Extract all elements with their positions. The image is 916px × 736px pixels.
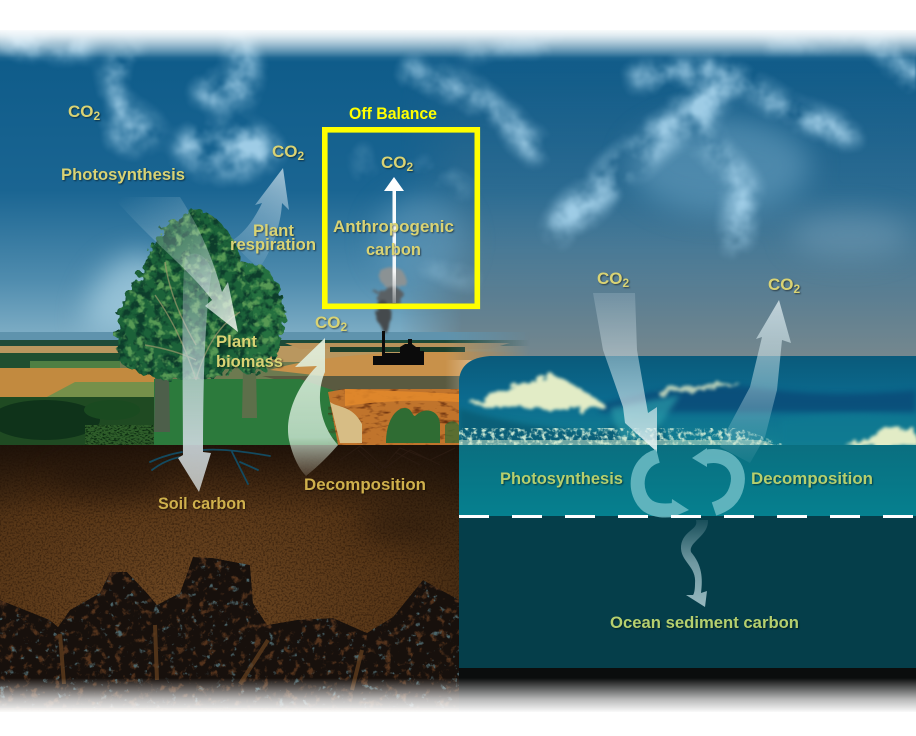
tree: small xyxy=(219,263,285,418)
label: CO2 ocean in: CO xyxy=(597,269,622,288)
label: plant biomass xyxy=(216,332,283,371)
label: CO2 box: CO xyxy=(381,153,406,172)
panel: ocean surface xyxy=(459,350,916,446)
label: plant respiration xyxy=(230,221,316,254)
arrow: land decomposition xyxy=(288,338,338,476)
label: soil carbon: Soil carbon xyxy=(158,494,246,513)
arrow: ocean cycle left xyxy=(638,456,689,518)
label: plant biomass: Plant xyxy=(216,332,257,351)
label: ocean sediment carbon: Ocean sediment carbon xyxy=(610,613,799,632)
label: decomposition ocean: Decomposition xyxy=(751,469,873,488)
label: CO2 respiration: 2 xyxy=(298,149,304,163)
tree: large xyxy=(117,210,253,432)
arrow: photosynthesis into plant xyxy=(113,197,238,332)
factory with smoke xyxy=(373,268,424,365)
carbon-rich rock layer xyxy=(0,557,459,708)
label: CO2 box: 2 xyxy=(406,160,414,174)
label: plant respiration: respiration xyxy=(230,235,316,254)
dark soil patches xyxy=(68,471,436,548)
label: decomposition land: Decomposition xyxy=(304,475,426,494)
label: plant biomass: biomass xyxy=(216,352,283,371)
arrow: sediment sink xyxy=(681,520,708,607)
label: photosynthesis ocean: Photosynthesis xyxy=(500,469,623,488)
arrow: plant to soil carbon xyxy=(178,254,212,492)
rock seams xyxy=(60,625,362,690)
arrow: ocean carbon uptake xyxy=(593,293,657,452)
arrow: plant respiration xyxy=(233,168,289,267)
label: CO2 sky: CO xyxy=(68,102,94,121)
background: sky xyxy=(0,30,916,360)
label: CO2 ocean in: 2 xyxy=(622,276,630,290)
arrow: ocean carbon release xyxy=(720,300,791,463)
label: anthropogenic carbon: Anthropogenic xyxy=(333,217,454,236)
label: CO2 sky: 2 xyxy=(94,109,100,123)
divider line xyxy=(459,515,916,518)
label: plant respiration: Plant xyxy=(253,221,294,240)
grass and fire patch xyxy=(328,389,459,445)
label: anthropogenic carbon xyxy=(333,217,454,259)
roots xyxy=(150,450,270,484)
panel: ocean depths xyxy=(459,445,916,712)
label: CO2 respiration: CO xyxy=(272,142,298,161)
landscape xyxy=(0,332,530,445)
white arrow xyxy=(384,177,404,303)
label: CO2 decomposition: 2 xyxy=(340,320,348,334)
panel: soil xyxy=(0,445,459,712)
soft haze clouds xyxy=(85,117,910,335)
label: CO2 ocean out: CO xyxy=(768,275,794,294)
off balance box xyxy=(325,104,477,306)
clouds xyxy=(10,40,916,280)
arrow: ocean cycle right xyxy=(692,448,738,509)
grass roots xyxy=(353,446,455,464)
heading: Off Balance xyxy=(349,104,437,123)
label: CO2 ocean out: 2 xyxy=(794,282,800,296)
label: anthropogenic carbon: carbon xyxy=(366,240,421,259)
label: photosynthesis land: Photosynthesis xyxy=(61,165,185,184)
labels xyxy=(61,102,873,632)
green meadow xyxy=(154,379,340,445)
label: CO2 decomposition: CO xyxy=(315,313,340,332)
